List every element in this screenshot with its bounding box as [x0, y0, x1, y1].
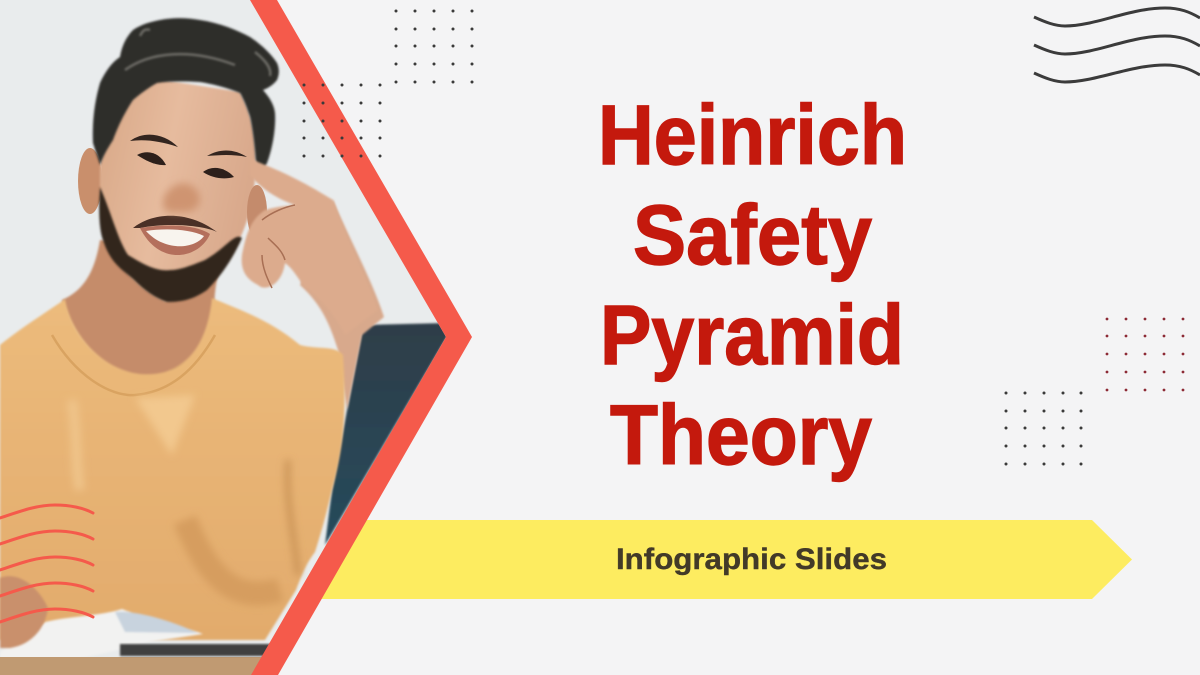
beard — [99, 187, 242, 302]
shirt folds — [72, 395, 298, 594]
table and tablet — [0, 644, 300, 675]
laptop — [325, 323, 447, 545]
hand — [240, 160, 342, 289]
title: Theory — [610, 388, 872, 482]
open notebook — [2, 608, 203, 657]
title: Heinrich — [598, 88, 907, 182]
dot grid: over photo — [302, 84, 382, 158]
photo: thinking man at desk — [0, 0, 480, 675]
dark wavy lines — [1034, 8, 1200, 82]
shirt collar — [52, 335, 215, 395]
title — [598, 88, 907, 482]
neck shadow — [170, 335, 215, 380]
dot grid: red — [1106, 318, 1184, 391]
red wavy lines — [0, 505, 93, 622]
neck — [62, 240, 225, 380]
eyes and brows — [130, 135, 247, 178]
red chevron band — [250, 0, 472, 675]
dot grid: bottom right — [1004, 392, 1082, 466]
face — [100, 78, 256, 302]
title: Safety — [633, 188, 872, 282]
nose — [163, 183, 200, 212]
right ear — [247, 185, 267, 231]
finger lines — [262, 205, 295, 288]
shirt — [0, 298, 345, 640]
dot grid: top centre — [394, 10, 474, 84]
hair — [93, 18, 279, 180]
hair highlights — [125, 29, 270, 76]
yellow arrow banner — [315, 520, 1132, 599]
left ear — [78, 148, 102, 214]
forearm — [300, 200, 384, 410]
subtitle: Infographic Slides — [616, 543, 887, 576]
title: Pyramid — [600, 288, 904, 382]
moustache and mouth — [133, 216, 217, 255]
writing hand — [0, 576, 48, 648]
